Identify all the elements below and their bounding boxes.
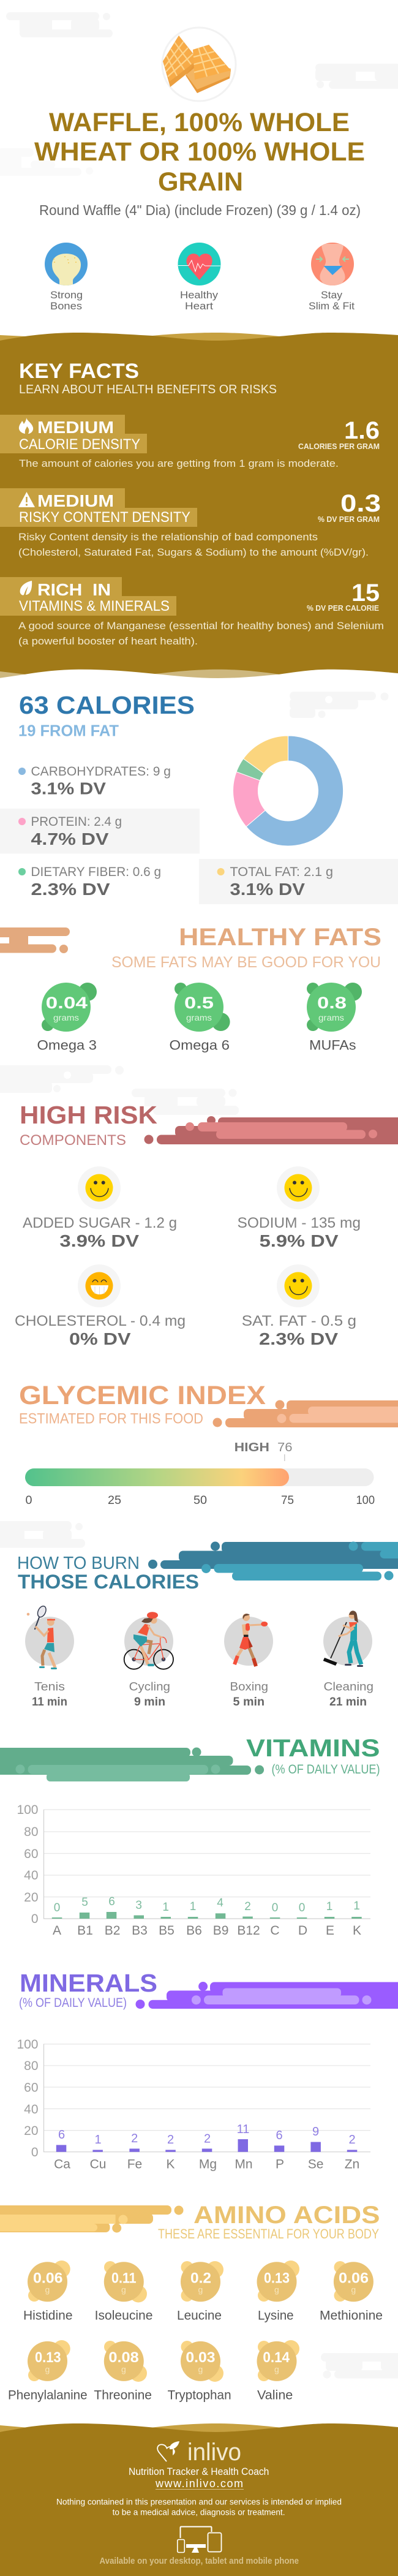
amino acid: isoleucine: g: [121, 2285, 126, 2295]
section header: vitamins: (% OF DAILY VALUE): [272, 1762, 380, 1777]
calorie density fact: MEDIUM: [37, 418, 114, 437]
exercise: cleaning: Cleaning: [323, 1680, 374, 1693]
chart: vitamins bars: K: [353, 1924, 361, 1938]
amino acid: lysine: g: [274, 2285, 279, 2295]
chart: minerals bars: 1: [94, 2133, 102, 2147]
amino acid: tryptophan: Tryptophan: [168, 2389, 231, 2403]
key facts heading: KEY FACTS: [19, 360, 139, 383]
chart: vitamins bars: B6: [186, 1924, 202, 1938]
chart: vitamins bars: 1: [353, 1900, 360, 1913]
rich in vitamins and minerals fact: A good source of Manganese (essential for healthy bones) and Selenium: [18, 620, 384, 632]
title: GRAIN: [158, 168, 243, 197]
amino acid: leucine: g: [198, 2285, 203, 2295]
risky content density fact: 0.3: [340, 490, 381, 517]
legend: carbohydrates: [18, 765, 171, 798]
section header: glycemic index: ESTIMATED FOR THIS FOOD: [19, 1410, 203, 1427]
logo: inlivo: [157, 2439, 241, 2466]
risk item: saturated fat: SAT. FAT - 0.5 g: [242, 1313, 356, 1329]
chart: minerals bars: Zn: [345, 2158, 359, 2172]
amino acid: valine: g: [274, 2364, 279, 2374]
risk item: saturated fat: 2.3% DV: [259, 1329, 338, 1348]
chart: vitamins bars: [17, 1803, 370, 1938]
amino acid: isoleucine: [95, 2261, 153, 2323]
section header: healthy fats: SOME FATS MAY BE GOOD FOR YOU: [111, 954, 381, 971]
chart: vitamins bars: A: [53, 1924, 61, 1938]
amino acid: histidine: [23, 2261, 72, 2323]
rich in vitamins and minerals fact: RICH IN: [37, 580, 111, 599]
amino acid: isoleucine: Isoleucine: [95, 2309, 153, 2323]
icon: leaf: [20, 581, 32, 595]
panel: footer: [0, 2423, 398, 2576]
section header: vitamins: [0, 1735, 380, 1781]
section header: glycemic index: GLYCEMIC INDEX: [19, 1381, 266, 1410]
exercise: boxing: 5 min: [233, 1696, 265, 1709]
section header: how to burn those calories: HOW TO BURN: [17, 1554, 140, 1573]
chart: minerals bars: 9: [312, 2125, 319, 2139]
legend: carbohydrates: CARBOHYDRATES: 9 g: [31, 765, 171, 779]
risky content density fact: [0, 488, 381, 558]
chart: vitamins bars: B12: [237, 1924, 260, 1938]
chart: vitamins bars: 1: [162, 1901, 169, 1914]
risk item: cholesterol: 0% DV: [69, 1329, 131, 1348]
healthy fat: omega 3: [37, 983, 97, 1052]
legend: total fat: TOTAL FAT: 2.1 g: [230, 865, 333, 879]
chart: minerals bars: 0: [31, 2145, 38, 2159]
benefit: strong bones: [45, 243, 88, 312]
coach tagline: Nutrition Tracker & Health Coach: [129, 2466, 269, 2477]
amino acid: phenylalanine: g: [45, 2364, 50, 2374]
heading: 63 calories: [18, 691, 195, 740]
chart: vitamins bars: 40: [24, 1868, 38, 1883]
legend: carbohydrates: 3.1% DV: [31, 779, 106, 798]
healthy fat: omega 3: Omega 3: [37, 1038, 97, 1052]
amino acid: threonine: g: [121, 2364, 126, 2374]
chart: vitamins bars: 6: [108, 1895, 115, 1908]
chart: minerals bars: Se: [308, 2158, 323, 2172]
amino acid: leucine: [177, 2261, 223, 2323]
healthy fat: omega 6: [169, 983, 230, 1052]
section header: how to burn those calories: [17, 1541, 398, 1593]
section header: how to burn those calories: THOSE CALORIES: [18, 1571, 199, 1593]
rich in vitamins and minerals fact: (a powerful booster of heart health).: [18, 635, 198, 647]
title: [34, 108, 365, 197]
chart: minerals bars: 11: [237, 2123, 249, 2136]
chart: minerals bars: 2: [348, 2133, 356, 2147]
chart: vitamins bars: 60: [24, 1847, 38, 1861]
section header: minerals: [19, 1969, 398, 2010]
benefit: healthy heart: Healthy: [180, 289, 219, 301]
benefit: strong bones: Strong: [50, 289, 83, 301]
chart: minerals bars: 100: [17, 2038, 38, 2052]
chart: glycemic index gauge: [25, 1441, 375, 1507]
legend: protein: [0, 809, 200, 854]
chart: vitamins bars: C: [270, 1924, 280, 1938]
logo: inlivo: inlivo: [187, 2439, 241, 2466]
exercise: cleaning: 21 min: [329, 1696, 367, 1709]
chart: glycemic index gauge: 75: [281, 1494, 294, 1507]
chart: vitamins bars: 1: [326, 1900, 332, 1913]
amino acid: lysine: 0.13: [264, 2270, 290, 2286]
chart: minerals bars: 2: [204, 2132, 211, 2145]
risk item: saturated fat: [242, 1264, 356, 1348]
rich in vitamins and minerals fact: [0, 577, 384, 647]
chart: minerals bars: 40: [24, 2102, 38, 2117]
exercise: cleaning: [323, 1611, 374, 1709]
amino acid: phenylalanine: Phenylalanine: [8, 2389, 88, 2403]
chart: vitamins bars: 0: [31, 1912, 38, 1926]
legend: protein: PROTEIN: 2.4 g: [31, 815, 122, 829]
chart: vitamins bars: 2: [244, 1900, 251, 1913]
healthy fat: MUFAs: [307, 983, 362, 1052]
healthy fat: omega 3: grams: [53, 1013, 79, 1022]
exercise: tennis: Tenis: [34, 1680, 65, 1693]
chart: vitamins bars: 3: [135, 1899, 142, 1912]
disclaimer: [56, 2497, 342, 2517]
section header: healthy fats: [0, 924, 381, 971]
healthy fat: omega 6: Omega 6: [169, 1038, 230, 1052]
chart: vitamins bars: 4: [217, 1897, 223, 1909]
risky content density fact: % DV PER GRAM: [318, 515, 380, 524]
healthy fat: MUFAs: 0.8: [317, 994, 347, 1012]
risk item: sodium: [238, 1166, 361, 1250]
risky content density fact: RISKY CONTENT DENSITY: [19, 509, 190, 526]
legend: total fat: 3.1% DV: [230, 880, 305, 899]
exercise: boxing: [224, 1614, 273, 1709]
chart: vitamins bars: 80: [24, 1825, 38, 1839]
healthy fat: MUFAs: grams: [318, 1013, 344, 1022]
chart: minerals bars: P: [276, 2158, 284, 2172]
icon: warning triangle: [18, 492, 35, 507]
chart: glycemic index gauge: HIGH: [235, 1441, 269, 1454]
benefit: healthy heart: Heart: [185, 300, 213, 312]
calorie density fact: 1.6: [344, 417, 380, 444]
risk item: sodium: SODIUM - 135 mg: [238, 1215, 361, 1231]
heading: 63 calories: 19 FROM FAT: [18, 722, 119, 740]
section header: amino acids: [0, 2202, 380, 2242]
chart: vitamins bars: 5: [81, 1896, 88, 1909]
risky content density fact: Risky Content density is the relationship of bad components: [18, 531, 318, 543]
legend: dietary fiber: 2.3% DV: [31, 880, 110, 899]
section header: high risk: COMPONENTS: [20, 1132, 126, 1149]
chart: minerals bars: 80: [24, 2059, 38, 2073]
chart: vitamins bars: 20: [24, 1890, 38, 1905]
chart: minerals bars: 6: [58, 2128, 65, 2142]
section header: glycemic index: [19, 1381, 398, 1427]
healthy fat: omega 6: 0.5: [184, 994, 214, 1012]
availability note: Available on your desktop, tablet and mobile phone: [99, 2556, 299, 2566]
section header: amino acids: AMINO ACIDS: [193, 2202, 380, 2229]
amino acid: threonine: Threonine: [94, 2389, 152, 2403]
section header: vitamins: VITAMINS: [246, 1735, 380, 1762]
calorie density fact: [0, 415, 380, 469]
website link: www.inlivo.com: [155, 2477, 243, 2490]
amino acid: threonine: [94, 2341, 152, 2403]
risky content density fact: MEDIUM: [37, 491, 114, 510]
chart: minerals bars: 60: [24, 2080, 38, 2095]
chart: glycemic index gauge: 100: [356, 1494, 375, 1507]
calorie density fact: CALORIES PER GRAM: [298, 442, 380, 451]
chart: minerals bars: Mn: [235, 2158, 253, 2172]
amino acid: methionine: g: [351, 2285, 356, 2295]
amino acid: valine: Valine: [257, 2389, 293, 2403]
icon: flame: [19, 418, 33, 434]
amino acid: methionine: Methionine: [320, 2309, 383, 2323]
benefit: stay slim and fit: Stay: [321, 289, 342, 301]
amino acid: histidine: 0.06: [33, 2270, 62, 2286]
chart: glycemic index gauge: 50: [193, 1494, 207, 1507]
serving size subtitle: Round Waffle (4" Dia) (include Frozen) (39 g / 1.4 oz): [39, 202, 361, 218]
risk item: added sugar: 3.9% DV: [59, 1231, 139, 1250]
exercise: cycling: Cycling: [129, 1680, 170, 1693]
chart: vitamins bars: B2: [105, 1924, 120, 1938]
key facts heading: [19, 360, 277, 396]
exercise: cycling: 9 min: [134, 1696, 165, 1709]
title: WHEAT OR 100% WHOLE: [34, 138, 365, 167]
rich in vitamins and minerals fact: VITAMINS & MINERALS: [19, 598, 170, 614]
healthy fat: omega 6: grams: [186, 1013, 212, 1022]
exercise: tennis: 11 min: [32, 1696, 67, 1709]
amino acid: methionine: [320, 2261, 383, 2323]
chart: glycemic index gauge: 0: [26, 1494, 32, 1507]
title: WAFFLE, 100% WHOLE: [49, 108, 350, 137]
amino acid: methionine: 0.06: [339, 2270, 369, 2286]
key facts heading: LEARN ABOUT HEALTH BENEFITS OR RISKS: [19, 383, 277, 396]
rich in vitamins and minerals fact: 15: [351, 580, 380, 606]
chart: vitamins bars: 1: [190, 1900, 196, 1913]
healthy fat: omega 3: 0.04: [46, 994, 88, 1012]
chart: vitamins bars: B3: [132, 1924, 148, 1938]
chart: minerals bars: 20: [24, 2124, 38, 2138]
risky content density fact: (Cholesterol, Saturated Fat, Sugars & Sodium) to the amount (%DV/gr).: [18, 546, 369, 558]
chart: minerals bars: 2: [167, 2133, 174, 2147]
legend: protein: 4.7% DV: [31, 829, 109, 848]
chart: vitamins bars: B9: [213, 1924, 228, 1938]
amino acid: lysine: Lysine: [258, 2309, 294, 2323]
chart: minerals bars: 2: [131, 2132, 138, 2145]
amino acid: tryptophan: [168, 2341, 231, 2403]
chart: vitamins bars: 100: [17, 1803, 38, 1817]
legend: dietary fiber: DIETARY FIBER: 0.6 g: [31, 865, 161, 879]
chart: minerals bars: [17, 2038, 370, 2172]
chart: vitamins bars: D: [298, 1924, 307, 1938]
exercise: tennis: [25, 1605, 74, 1709]
chart: vitamins bars: B1: [77, 1924, 93, 1938]
chart: vitamins bars: 0: [54, 1902, 60, 1914]
amino acid: phenylalanine: 0.13: [35, 2349, 61, 2366]
risk item: cholesterol: CHOLESTEROL - 0.4 mg: [15, 1313, 186, 1329]
exercise: cycling: [124, 1612, 173, 1709]
disclaimer: Nothing contained in this presentation and our services is intended or implied: [56, 2497, 342, 2507]
chart: minerals bars: Cu: [90, 2158, 106, 2172]
risk item: sodium: 5.9% DV: [260, 1231, 339, 1250]
benefit: strong bones: Bones: [50, 300, 82, 312]
amino acid: isoleucine: 0.11: [111, 2270, 137, 2286]
amino acid: phenylalanine: [8, 2340, 88, 2403]
chart: vitamins bars: B5: [159, 1924, 175, 1938]
chart: minerals bars: Mg: [199, 2158, 217, 2172]
exercise: boxing: Boxing: [230, 1680, 268, 1693]
rich in vitamins and minerals fact: % DV PER CALORIE: [307, 603, 379, 613]
benefit: healthy heart: [178, 243, 220, 312]
section header: high risk: [20, 1101, 398, 1149]
benefit: stay slim and fit: [309, 243, 355, 312]
legend: dietary fiber: [18, 865, 161, 899]
amino acid: valine: 0.14: [263, 2349, 290, 2366]
risk item: added sugar: [23, 1166, 177, 1250]
risk item: cholesterol: [15, 1264, 186, 1348]
amino acid: leucine: Leucine: [177, 2309, 222, 2323]
icon: devices: [178, 2526, 222, 2553]
amino acid: leucine: 0.2: [190, 2270, 211, 2286]
heading: 63 calories: 63 CALORIES: [19, 691, 195, 719]
chart: minerals bars: Ca: [54, 2158, 70, 2172]
risk item: added sugar: ADDED SUGAR - 1.2 g: [23, 1215, 177, 1231]
amino acid: valine: [257, 2340, 299, 2403]
chart: minerals bars: K: [166, 2158, 175, 2172]
chart: vitamins bars: 0: [299, 1902, 305, 1914]
section header: minerals: (% OF DAILY VALUE): [19, 1996, 127, 2010]
chart: glycemic index gauge: 76: [277, 1441, 293, 1454]
chart: glycemic index gauge: 25: [108, 1494, 121, 1507]
chart: vitamins bars: 0: [272, 1902, 278, 1914]
chart: calorie donut: [233, 736, 344, 846]
calorie density fact: The amount of calories you are getting from 1 gram is moderate.: [19, 458, 339, 469]
amino acid: threonine: 0.08: [108, 2349, 139, 2366]
amino acid: histidine: g: [45, 2285, 50, 2295]
calorie density fact: CALORIE DENSITY: [19, 436, 140, 453]
legend: total fat: [199, 859, 398, 904]
food image: waffles: [162, 28, 236, 101]
amino acid: tryptophan: g: [198, 2364, 203, 2374]
healthy fat: MUFAs: MUFAs: [309, 1038, 356, 1052]
chart: vitamins bars: E: [326, 1924, 334, 1938]
benefit: stay slim and fit: Slim & Fit: [309, 300, 355, 312]
amino acid: tryptophan: 0.03: [186, 2349, 216, 2366]
section header: healthy fats: HEALTHY FATS: [179, 924, 381, 951]
section header: high risk: HIGH RISK: [20, 1101, 157, 1129]
chart: minerals bars: Fe: [127, 2158, 142, 2172]
amino acid: histidine: Histidine: [23, 2309, 72, 2323]
section header: minerals: MINERALS: [20, 1969, 157, 1997]
amino acid: lysine: [257, 2261, 299, 2323]
chart: minerals bars: 6: [276, 2129, 283, 2142]
disclaimer: to be a medical advice, diagnosis or treatment.: [113, 2507, 285, 2517]
panel: key facts: [0, 333, 398, 678]
